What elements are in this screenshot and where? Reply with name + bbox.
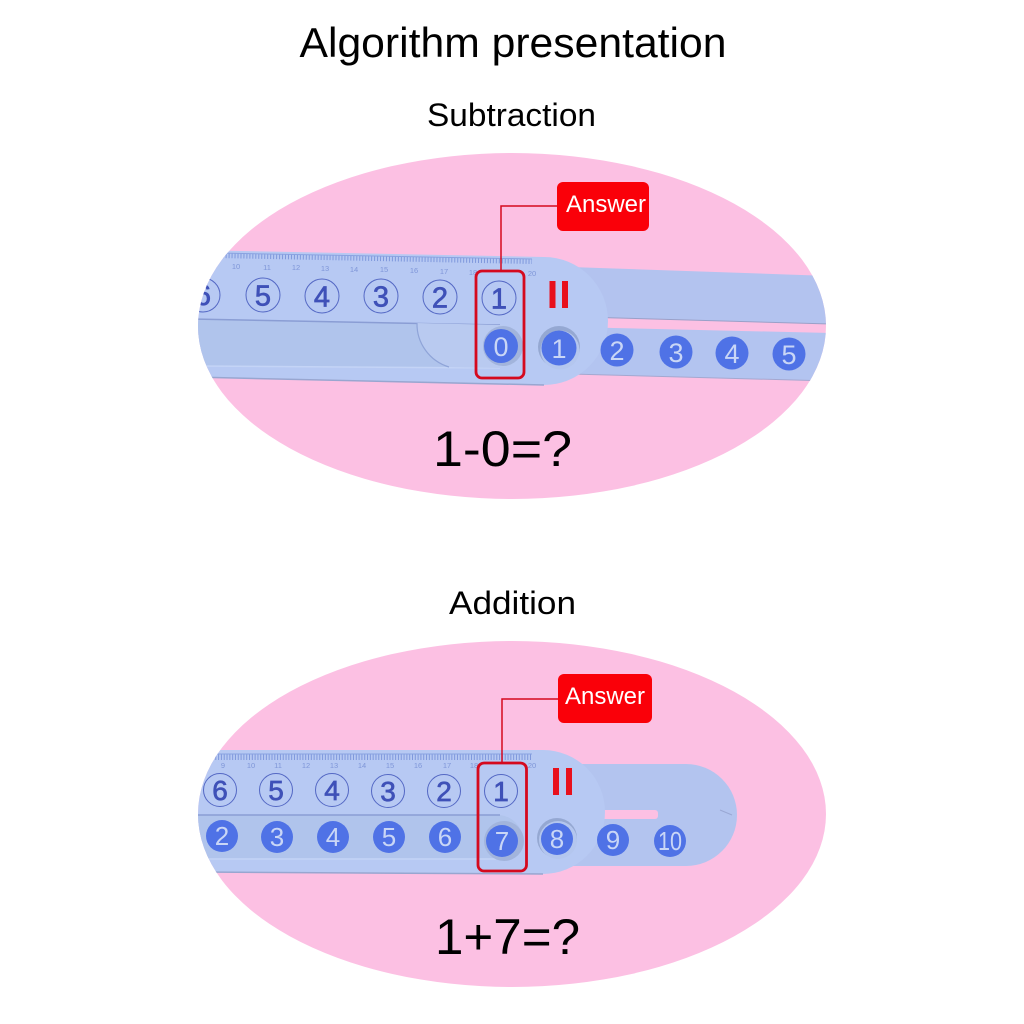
ruler numbers — [221, 763, 536, 768]
ruler device: 3 — [668, 338, 684, 368]
ruler numbers: 16 — [410, 266, 418, 275]
ruler device: 3 — [270, 822, 284, 852]
ruler numbers: 20 — [528, 761, 536, 770]
outlined numbers — [204, 774, 518, 808]
ruler device: 2 — [609, 336, 625, 366]
panel: subtraction — [186, 153, 830, 499]
ruler device: 7 — [495, 826, 509, 856]
window wells — [538, 326, 580, 363]
main ruler body — [190, 250, 608, 385]
ruler numbers: 17 — [440, 267, 448, 276]
ruler device: 2 — [436, 776, 452, 807]
slider tab — [418, 323, 510, 368]
window wells — [537, 818, 577, 858]
answer label: Answer — [566, 191, 646, 218]
heading: subtraction: Subtraction — [427, 97, 596, 133]
panel: addition — [190, 641, 826, 987]
ruler numbers: 15 — [386, 761, 394, 770]
filled numbers — [206, 820, 686, 857]
ruler device — [190, 750, 737, 874]
ruler numbers: 18 — [469, 268, 477, 277]
ruler numbers: 11 — [263, 263, 271, 272]
ruler numbers: 15 — [380, 265, 388, 274]
main ruler body — [190, 750, 605, 874]
ruler numbers: 18 — [470, 761, 478, 770]
ruler device: 6 — [212, 775, 228, 806]
ruler device: 10 — [658, 826, 682, 856]
title: Algorithm presentation — [300, 19, 726, 66]
pink ellipse background — [198, 641, 826, 987]
ruler device: 2 — [215, 821, 229, 851]
ruler numbers: 13 — [330, 761, 338, 770]
ruler device: 5 — [255, 280, 271, 312]
equals sign — [553, 768, 572, 795]
ruler device: 6 — [195, 280, 211, 312]
ruler numbers: 9 — [221, 761, 225, 770]
equation: 1-0=? — [433, 421, 572, 477]
ruler device: 4 — [314, 282, 330, 314]
answer highlight box — [478, 763, 526, 871]
ruler numbers — [232, 264, 536, 276]
ruler numbers: 10 — [247, 761, 255, 770]
ruler device: 5 — [382, 822, 396, 852]
equation: 1+7=? — [435, 909, 580, 965]
ruler device: 3 — [380, 776, 396, 807]
ruler ticks — [215, 754, 531, 760]
outlined numbers — [186, 278, 516, 315]
heading: addition: Addition — [449, 585, 576, 621]
ruler numbers: 14 — [358, 761, 366, 770]
ruler numbers: 16 — [414, 761, 422, 770]
ruler numbers: 10 — [232, 262, 240, 271]
filled numbers — [484, 329, 806, 370]
equals sign — [550, 281, 568, 308]
ruler device: 8 — [550, 824, 564, 854]
ruler numbers: 12 — [302, 761, 310, 770]
upper back strip — [570, 267, 830, 324]
ruler device: 4 — [326, 822, 340, 852]
answer highlight box — [476, 271, 524, 378]
slider groove — [198, 816, 209, 859]
ruler device: 1 — [493, 776, 509, 807]
ruler numbers: 11 — [274, 761, 282, 770]
ruler device: 9 — [606, 825, 620, 855]
strip arrow mark — [720, 810, 732, 815]
ruler device: 6 — [438, 822, 452, 852]
ruler numbers: 14 — [350, 265, 358, 274]
ruler device: 1 — [491, 284, 507, 316]
ruler numbers: 17 — [443, 761, 451, 770]
answer label — [558, 674, 652, 723]
ruler ticks — [190, 255, 532, 262]
infographic canvas — [198, 26, 826, 987]
ruler device: 2 — [432, 282, 448, 314]
ruler numbers: 12 — [292, 263, 300, 272]
lower number strip — [570, 327, 830, 381]
ruler device — [186, 250, 830, 385]
ruler device: 1 — [551, 334, 567, 364]
connector line — [502, 699, 559, 763]
ruler device: 5 — [781, 340, 797, 370]
ruler device: 3 — [373, 282, 389, 314]
ruler numbers: 20 — [528, 269, 536, 278]
slider groove — [198, 319, 206, 366]
answer label: Answer — [565, 683, 645, 710]
slot — [604, 810, 658, 819]
connector line — [501, 206, 558, 271]
answer label — [557, 182, 649, 231]
pink ellipse background — [198, 153, 826, 499]
ruler device: 5 — [268, 775, 284, 806]
ruler numbers: 13 — [321, 264, 329, 273]
back strip — [570, 764, 737, 866]
ruler device: 4 — [724, 339, 740, 369]
ruler device: 4 — [324, 775, 340, 806]
ruler device: 0 — [493, 332, 509, 362]
